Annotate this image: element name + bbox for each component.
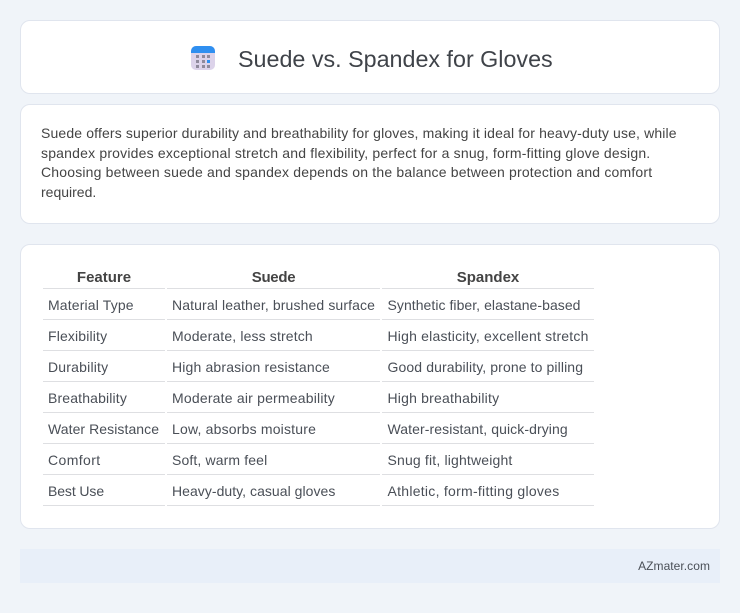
row: material type: Material Type <box>48 297 134 313</box>
panel: comparison table <box>20 244 720 529</box>
table header: Spandex <box>457 269 519 286</box>
row: durability <box>48 359 583 375</box>
footer credit: AZmater.com <box>638 559 710 573</box>
comparison table <box>43 269 594 506</box>
row: water resistance <box>48 421 568 437</box>
icon: calendar <box>191 46 215 70</box>
row: material type: Natural leather, brushed surface <box>172 297 375 313</box>
row: durability: Good durability, prone to pilling <box>388 359 583 375</box>
table header: Feature <box>77 269 131 286</box>
summary text: required. <box>41 184 96 200</box>
summary text: spandex provides exceptional stretch and flexibility, perfect for a snug, form-fitting glove design. <box>41 145 650 161</box>
row: flexibility: Flexibility <box>48 328 107 344</box>
row: durability: High abrasion resistance <box>172 359 330 375</box>
row: water resistance: Water-resistant, quick-drying <box>388 421 568 437</box>
row: flexibility: High elasticity, excellent stretch <box>388 328 589 344</box>
summary text <box>41 125 677 200</box>
panel: title card <box>20 20 720 94</box>
row: material type: Synthetic fiber, elastane-based <box>388 297 581 313</box>
row: best use: Best Use <box>48 483 104 499</box>
row: comfort: Soft, warm feel <box>172 452 267 468</box>
title: Suede vs. Spandex for Gloves <box>238 46 553 72</box>
row: breathability: Breathability <box>48 390 127 406</box>
table header: Suede <box>252 269 295 286</box>
row: breathability: Moderate air permeability <box>172 390 335 406</box>
row: water resistance: Low, absorbs moisture <box>172 421 316 437</box>
row: material type <box>48 297 581 313</box>
row: breathability <box>48 390 500 406</box>
row: flexibility: Moderate, less stretch <box>172 328 313 344</box>
row: best use: Athletic, form-fitting gloves <box>388 483 560 499</box>
footer bar <box>20 549 720 583</box>
row: best use <box>48 483 560 499</box>
summary text: Choosing between suede and spandex depends on the balance between protection and comfort <box>41 164 652 180</box>
panel: summary <box>20 104 720 224</box>
row: water resistance: Water Resistance <box>48 421 159 437</box>
row: durability: Durability <box>48 359 108 375</box>
row: comfort: Snug fit, lightweight <box>388 452 512 468</box>
summary text: Suede offers superior durability and breathability for gloves, making it ideal for heavy-duty use, while <box>41 125 677 141</box>
row: breathability: High breathability <box>388 390 499 406</box>
row: comfort <box>48 452 512 468</box>
row: best use: Heavy-duty, casual gloves <box>172 483 335 499</box>
row: flexibility <box>48 328 589 344</box>
table header <box>77 269 519 286</box>
row: comfort: Comfort <box>48 452 101 468</box>
